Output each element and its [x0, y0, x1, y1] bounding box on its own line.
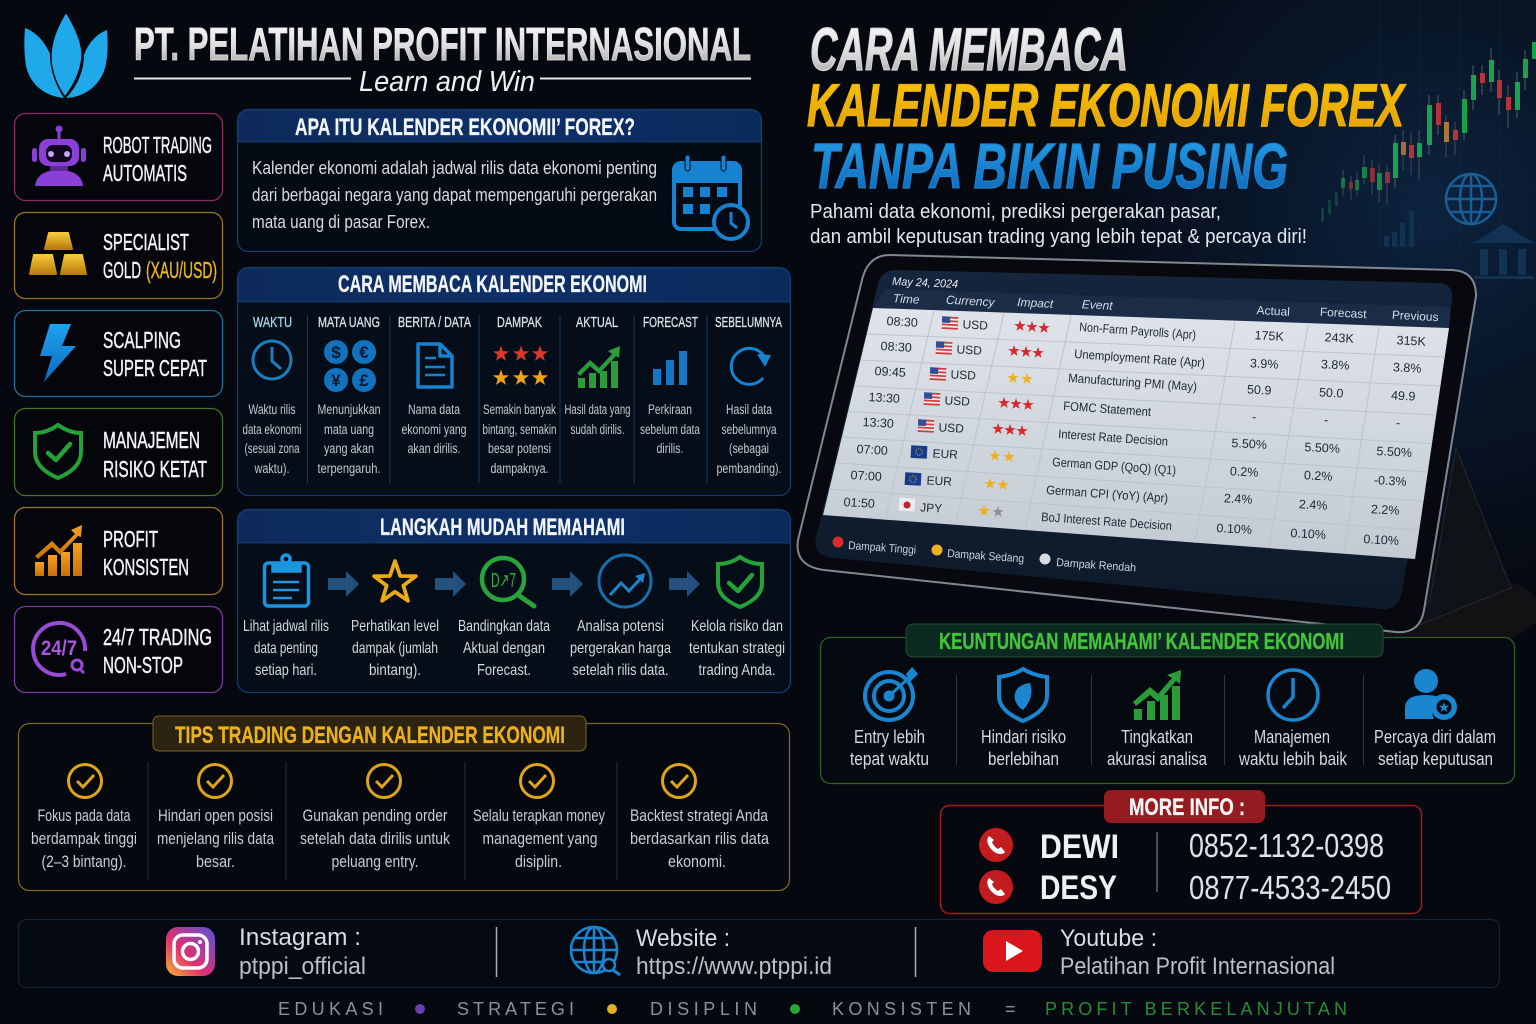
- text block: [252, 158, 657, 232]
- previous values: -: [1396, 416, 1401, 430]
- icon: gold bars: [30, 233, 86, 274]
- step 3: [458, 558, 550, 679]
- step 5: Kelola risiko dan: [691, 618, 783, 635]
- text block: mata uang di pasar Forex.: [252, 212, 430, 232]
- impact legend: Dampak Sedang: [947, 548, 1024, 565]
- column: forecast: FORECAST: [643, 314, 698, 331]
- actual values: 0.2%: [1230, 464, 1259, 480]
- column: waktu: WAKTU: [253, 314, 292, 331]
- previous values: 315K: [1396, 333, 1427, 349]
- table headers: Previous: [1392, 308, 1439, 324]
- tip 5: berdasarkan rilis data: [630, 830, 770, 848]
- step 2: Perhatikan level: [351, 618, 439, 635]
- forecast values: 50.0: [1319, 385, 1344, 401]
- currency codes: [920, 317, 989, 516]
- tip 4: disiplin.: [515, 853, 562, 871]
- currency codes: JPY: [920, 500, 943, 516]
- benefit 3: [1107, 670, 1208, 769]
- column: aktual: sudah dirilis.: [570, 422, 624, 437]
- screen: [815, 270, 1452, 609]
- previous values: 5.50%: [1376, 444, 1412, 460]
- step 4: pergerakan harga: [570, 640, 671, 657]
- panel: cara membaca kalender: [238, 268, 790, 496]
- benefit 1: Entry lebih: [854, 727, 925, 747]
- benefit 1: [850, 667, 929, 769]
- column: forecast: [640, 314, 700, 456]
- currency codes: EUR: [926, 473, 953, 489]
- times: 07:00: [850, 468, 882, 484]
- website: https://www.ptppi.id: [636, 953, 832, 980]
- panel: keuntungan: [820, 624, 1514, 784]
- forecast values: 5.50%: [1304, 440, 1340, 456]
- table headers: Forecast: [1320, 305, 1368, 321]
- times: 01:50: [843, 495, 875, 511]
- tip 2: Hindari open posisi: [158, 807, 273, 825]
- forecast values: -: [1324, 413, 1329, 427]
- column: mata uang: €: [359, 343, 369, 362]
- device body: [798, 255, 1476, 632]
- column: aktual: AKTUAL: [576, 314, 618, 331]
- subtitle: dan ambil keputusan trading yang lebih tepat & percaya diri!: [810, 226, 1307, 248]
- panel: manajemen risiko: [14, 408, 222, 496]
- panel: profit konsisten: [14, 508, 222, 594]
- panel: 24/7 trading: 24/7 TRADING: [103, 624, 212, 650]
- step 3: D↗7: [491, 570, 516, 592]
- times: [843, 314, 918, 511]
- step 2: bintang).: [369, 662, 421, 679]
- step 3: Aktual dengan: [463, 640, 545, 657]
- table headers: Currency: [946, 293, 996, 309]
- tip 1: Fokus pada data: [38, 807, 131, 825]
- youtube: [983, 925, 1335, 980]
- table headers: Impact: [1017, 295, 1054, 311]
- times: 08:30: [880, 339, 912, 355]
- actual values: 2.4%: [1224, 491, 1253, 507]
- icon: globe: [1446, 174, 1496, 224]
- tip 2: menjelang rilis data: [157, 830, 275, 848]
- previous values: 0.10%: [1363, 532, 1399, 548]
- contact: desy: 0877-4533-2450: [1189, 869, 1391, 906]
- currency flags: [899, 316, 958, 511]
- column: mata uang: yang akan: [324, 441, 374, 456]
- times: 09:45: [874, 364, 906, 380]
- tablet: [798, 255, 1511, 632]
- step 1: setiap hari.: [255, 662, 317, 679]
- times: 07:00: [856, 442, 888, 458]
- impact legend: Dampak Rendah: [1056, 557, 1136, 575]
- panel: specialist gold: SPECIALIST: [103, 229, 189, 255]
- column: dampak: besar potensi: [488, 441, 551, 456]
- icon: calendar: [674, 155, 748, 239]
- benefit 1: tepat waktu: [850, 749, 929, 769]
- column: mata uang: ¥: [331, 371, 341, 390]
- tip 3: setelah data dirilis untuk: [300, 830, 451, 848]
- heading tab: TIPS TRADING DENGAN KALENDER EKONOMI: [175, 722, 565, 749]
- impact legend: Dampak Tinggi: [848, 540, 916, 557]
- heading tab: [1104, 790, 1265, 823]
- contact: dewi: [979, 827, 1384, 866]
- benefit 5: [1374, 669, 1496, 769]
- tip 3: Gunakan pending order: [302, 807, 448, 825]
- column: berita data: Nama data: [408, 402, 460, 417]
- currency codes: USD: [944, 393, 971, 409]
- column: sebelumnya: sebelumnya: [722, 422, 777, 437]
- tip 1: [31, 764, 137, 871]
- panel: specialist gold: GOLD: [103, 257, 141, 283]
- heading tab: [153, 716, 586, 751]
- step 3: Forecast.: [477, 662, 531, 679]
- panel: 24/7 trading: [14, 606, 222, 692]
- arrow 4: [669, 571, 700, 597]
- arrow 2: [435, 571, 466, 597]
- column: forecast: Perkiraan: [648, 402, 692, 417]
- benefit 3: Tingkatkan: [1121, 727, 1193, 747]
- company title: PT. PELATIHAN PROFIT INTERNASIONAL: [134, 18, 751, 70]
- event names: Unemployment Rate (Apr): [1074, 347, 1205, 370]
- contact: dewi: 0852-1132-0398: [1189, 827, 1384, 864]
- panel: manajemen risiko: MANAJEMEN: [103, 427, 200, 453]
- contact: desy: DESY: [1040, 869, 1117, 907]
- currency codes: EUR: [932, 446, 959, 462]
- footer tagline: DISIPLIN: [650, 999, 757, 1019]
- column: waktu: (sesuai zona: [244, 441, 300, 456]
- column: dampak: dampaknya.: [490, 461, 548, 476]
- column: mata uang: mata uang: [324, 422, 374, 437]
- currency codes: USD: [950, 367, 977, 383]
- heading tab: KEUNTUNGAN MEMAHAMI’ KALENDER EKONOMI: [939, 628, 1344, 654]
- benefit 4: waktu lebih baik: [1238, 749, 1348, 769]
- currency codes: USD: [938, 420, 965, 436]
- panel: specialist gold: [14, 212, 222, 298]
- arrow 3: [552, 571, 583, 597]
- column: sebelumnya: [715, 314, 782, 476]
- column: mata uang: MATA UANG: [318, 314, 380, 331]
- benefit 3: akurasi analisa: [1107, 749, 1208, 769]
- step 4: Analisa potensi: [577, 618, 664, 635]
- youtube: Youtube :: [1060, 925, 1157, 952]
- footer tagline: PROFIT BERKELANJUTAN: [1045, 999, 1347, 1019]
- benefit 5: setiap keputusan: [1378, 749, 1493, 769]
- previous values: 2.2%: [1371, 502, 1400, 518]
- step 1: [243, 555, 329, 679]
- column: mata uang: [318, 314, 380, 476]
- footer tagline: KONSISTEN: [832, 999, 971, 1019]
- step 4: [570, 555, 671, 679]
- forecast values: [1290, 330, 1355, 542]
- column: waktu: [242, 314, 302, 476]
- tip 4: Selalu terapkan money: [473, 807, 606, 825]
- step 5: tentukan strategi: [689, 640, 785, 657]
- panel: manajemen risiko: RISIKO KETAT: [103, 456, 207, 482]
- column: forecast: dirilis.: [656, 441, 684, 456]
- column: sebelumnya: Hasil data: [726, 402, 772, 417]
- column: dampak: Semakin banyak: [483, 402, 556, 417]
- panel: tips trading: [18, 716, 790, 890]
- instagram: Instagram :: [239, 924, 361, 951]
- column: waktu: data ekonomi: [242, 422, 302, 437]
- tip 1: (2–3 bintang).: [42, 853, 126, 871]
- panel: robot trading: [14, 114, 222, 200]
- tip 5: Backtest strategi Anda: [630, 807, 769, 825]
- footer tagline: EDUKASI: [278, 999, 383, 1019]
- actual values: 50.9: [1247, 382, 1272, 398]
- step 1: Lihat jadwal rilis: [243, 618, 329, 635]
- step 5: trading Anda.: [698, 662, 776, 679]
- candlestick chart: [1321, 42, 1536, 222]
- previous values: [1363, 333, 1427, 548]
- table header band: [873, 289, 1451, 328]
- event names: German GDP (QoQ) (Q1): [1052, 455, 1176, 478]
- column: mata uang: £: [359, 371, 369, 390]
- column: sebelumnya: pembanding).: [716, 461, 782, 476]
- company title: [134, 18, 751, 98]
- icon: bank: [1474, 224, 1534, 279]
- column: dampak: bintang, semakin: [482, 422, 556, 437]
- column: dampak: [482, 314, 556, 476]
- website: [571, 925, 832, 980]
- heading tab: MORE INFO :: [1129, 794, 1245, 821]
- panel: more info: [940, 790, 1422, 914]
- header band: [238, 268, 790, 302]
- icon: robot: [32, 126, 86, 186]
- table headers: Event: [1082, 297, 1114, 313]
- footer tagline: STRATEGI: [457, 999, 574, 1019]
- panel: langkah mudah: [238, 510, 790, 692]
- panel: scalping: SCALPING: [103, 327, 181, 353]
- forecast values: 2.4%: [1299, 497, 1328, 513]
- times: 13:30: [862, 415, 894, 431]
- forecast values: 0.2%: [1304, 468, 1333, 484]
- step 3: Bandingkan data: [458, 618, 550, 635]
- column: forecast: sebelum data: [640, 422, 700, 437]
- column: mata uang: $: [331, 343, 341, 362]
- impact stars: [978, 320, 1050, 517]
- text block: dari berbagai negara yang dapat mempengaruhi pergerakan: [252, 185, 657, 205]
- subtitle: Pahami data ekonomi, prediksi pergerakan pasar,: [810, 201, 1221, 223]
- event names: Manufacturing PMI (May): [1068, 371, 1197, 394]
- benefit 5: Percaya diri dalam: [1374, 727, 1496, 747]
- step 2: dampak (jumlah: [352, 640, 438, 657]
- panel: specialist gold: (XAU/USD): [146, 257, 217, 283]
- panel: 24/7 trading: NON-STOP: [103, 652, 183, 678]
- tip 4: management yang: [482, 830, 598, 848]
- column: sebelumnya: SEBELUMNYA: [715, 314, 782, 331]
- column: mata uang: terpengaruh.: [318, 461, 380, 476]
- heading: LANGKAH MUDAH MEMAHAMI: [380, 514, 625, 541]
- column: waktu: Waktu rilis: [248, 402, 296, 417]
- event names: FOMC Statement: [1063, 399, 1152, 419]
- actual values: 0.10%: [1216, 521, 1252, 537]
- event names: [1041, 320, 1205, 533]
- panel: profit konsisten: KONSISTEN: [103, 554, 189, 580]
- tip 2: besar.: [196, 853, 235, 871]
- currency codes: USD: [962, 317, 989, 333]
- step 4: setelah rilis data.: [572, 662, 668, 679]
- event names: BoJ Interest Rate Decision: [1041, 510, 1172, 533]
- header band: [238, 510, 790, 543]
- event names: German CPI (YoY) (Apr): [1046, 483, 1168, 506]
- step 1: data penting: [254, 640, 318, 657]
- event names: Non-Farm Payrolls (Apr): [1079, 320, 1196, 342]
- panel: scalping: SUPER CEPAT: [103, 355, 207, 381]
- company title: Learn and Win: [359, 66, 535, 98]
- benefit 2: Hindari risiko: [981, 727, 1066, 747]
- panel: social bar: [18, 920, 1500, 988]
- forecast values: 3.8%: [1321, 357, 1350, 373]
- icon: shield: [35, 425, 81, 478]
- table headers: Time: [893, 291, 920, 307]
- table headers: Actual: [1256, 303, 1290, 319]
- times: 13:30: [868, 390, 900, 406]
- icon: profit chart: [35, 525, 82, 576]
- contact: dewi: DEWI: [1040, 828, 1119, 866]
- forecast values: 243K: [1324, 330, 1355, 346]
- benefit 4: [1238, 670, 1348, 769]
- text block: Kalender ekonomi adalah jadwal rilis data ekonomi penting: [252, 158, 657, 178]
- table headers: [893, 291, 1439, 324]
- logo: [24, 12, 108, 98]
- previous values: 49.9: [1391, 388, 1416, 404]
- instagram: [166, 924, 366, 980]
- actual values: 3.9%: [1250, 356, 1279, 372]
- actual values: 5.50%: [1231, 436, 1267, 452]
- actual values: 175K: [1254, 328, 1285, 344]
- panel: apa itu kalender: [238, 110, 762, 252]
- step 2: [351, 561, 439, 679]
- column: dampak: DAMPAK: [497, 314, 542, 331]
- heading tab: [906, 624, 1383, 657]
- tip 3: peluang entry.: [332, 853, 418, 871]
- arrow 1: [328, 571, 359, 597]
- tip 4: [473, 764, 606, 871]
- column: berita data: akan dirilis.: [408, 441, 460, 456]
- column: aktual: Hasil data yang: [564, 402, 630, 417]
- event names: Interest Rate Decision: [1058, 427, 1169, 449]
- icon: 24/7 clock: 24/7: [41, 637, 77, 660]
- instagram: ptppi_official: [239, 953, 366, 980]
- tip 5: [630, 764, 770, 871]
- column: berita data: ekonomi yang: [402, 422, 466, 437]
- contact: desy: [979, 869, 1391, 907]
- icon: 24/7 clock: [33, 623, 85, 675]
- times: 08:30: [886, 314, 918, 330]
- previous values: 3.8%: [1393, 360, 1422, 376]
- panel: profit konsisten: PROFIT: [103, 526, 158, 552]
- benefit 2: [981, 669, 1066, 769]
- tip 5: ekonomi.: [668, 853, 726, 871]
- tip 3: [300, 764, 451, 871]
- headline: [807, 16, 1407, 202]
- actual values: -: [1252, 410, 1257, 424]
- date: May 24, 2024: [892, 276, 958, 291]
- column: berita data: BERITA / DATA: [398, 314, 471, 331]
- panel: scalping: [14, 310, 222, 396]
- table body: [823, 308, 1449, 559]
- column: waktu: waktu).: [254, 461, 290, 476]
- youtube: Pelatihan Profit Internasional: [1060, 953, 1335, 980]
- subtitle: [810, 201, 1307, 248]
- website: Website :: [636, 925, 730, 952]
- benefit 2: berlebihan: [988, 749, 1059, 769]
- tip 2: [157, 764, 275, 871]
- tip 1: berdampak tinggi: [31, 830, 137, 848]
- header band: [238, 110, 761, 142]
- icon: lightning: [40, 324, 76, 382]
- footer tagline: =: [1005, 999, 1016, 1019]
- forecast values: 0.10%: [1290, 526, 1326, 542]
- step 5: [689, 557, 785, 679]
- panel: robot trading: AUTOMATIS: [103, 160, 187, 186]
- actual values: [1216, 328, 1285, 537]
- headline: TANPA BIKIN PUSING: [811, 130, 1288, 202]
- column: sebelumnya: (sebagai: [729, 441, 769, 456]
- benefit 4: Manajemen: [1254, 727, 1330, 747]
- headline: CARA MEMBACA: [810, 16, 1128, 83]
- previous values: -0.3%: [1374, 473, 1407, 489]
- column: aktual: [564, 314, 630, 437]
- heading: CARA MEMBACA KALENDER EKONOMI: [338, 271, 647, 298]
- icon: small bars: [1384, 211, 1414, 247]
- currency codes: USD: [956, 342, 983, 358]
- footer tagline: [278, 999, 1347, 1019]
- stand: [1412, 448, 1511, 628]
- column: mata uang: Menunjukkan: [318, 402, 380, 417]
- impact legend: [832, 536, 1136, 575]
- heading: APA ITU KALENDER EKONOMII’ FOREX?: [295, 114, 635, 141]
- column: berita data: [398, 314, 471, 456]
- panel: robot trading: ROBOT TRADING: [103, 132, 212, 158]
